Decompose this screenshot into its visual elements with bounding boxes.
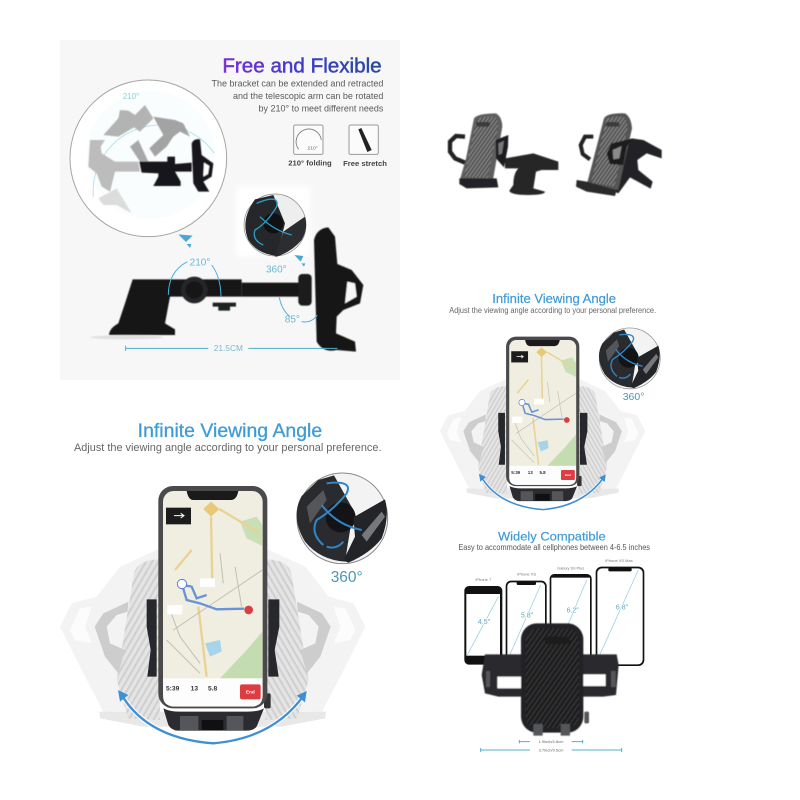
dimension: 3.7 inch [481, 747, 622, 752]
callout pointer triangle right [294, 255, 305, 267]
phone holder illustration [60, 473, 388, 743]
circle: 210 degree folding illustration: 210° [123, 92, 139, 101]
callout pointer triangles left [178, 234, 193, 248]
phone: iPhone 7: 4.5" [478, 619, 491, 626]
trip info on screen small [511, 470, 571, 477]
trip info on screen [166, 686, 255, 695]
phone: iPhone 7: iPhone 7 [475, 577, 492, 582]
angle label 210: 210° [190, 257, 210, 268]
ghost holder right [252, 548, 365, 727]
inset: ball joint [297, 473, 388, 564]
trip info on screen small: End [565, 473, 571, 477]
phone: iPhone XS Max: iPhone XS Max [605, 558, 633, 563]
heading: Widely Compatible: Widely Compatible [498, 530, 606, 544]
panel: infinite viewing angle small [440, 292, 660, 510]
phone: iPhone XS [506, 571, 547, 661]
phone: Galaxy S9 Plus [550, 565, 592, 659]
phone with map small [506, 337, 579, 486]
phone: iPhone 7 [464, 577, 502, 665]
dimension: 1.9 inch [519, 739, 583, 744]
cradle and side grips [147, 599, 279, 731]
trip info on screen small: 5.8 [539, 470, 546, 475]
phone holder front view [482, 623, 619, 736]
phone: iPhone XS: iPhone XS [517, 571, 536, 576]
phone with map [158, 486, 267, 708]
phone: iPhone XS Max: 6.8" [616, 604, 629, 611]
phone holder illustration small [440, 328, 660, 510]
dimension line [126, 343, 337, 353]
trip info on screen small: 5:39 [511, 470, 521, 475]
product: dashboard mount [450, 113, 558, 195]
rotation arc arrow small [479, 474, 606, 510]
description text: and the telescopic arm can be rotated [233, 91, 383, 101]
dimension: 1.9 inch: 1.9inch/4.8cm [539, 739, 564, 744]
ghost holder left small [440, 379, 516, 498]
heading: Free and Flexible: Free and Flexible [222, 55, 382, 77]
trip info on screen: 5.8 [208, 686, 218, 693]
icon: 210 degree folding: 210° [308, 145, 318, 151]
description text: The bracket can be extended and retracted [212, 78, 383, 88]
trip info on screen: 5:39 [166, 686, 180, 693]
blue rotation arcs [168, 262, 317, 322]
angle label 85: 85° [285, 314, 300, 325]
label: free stretch: Free stretch [343, 159, 387, 168]
subheading: size range: Easy to accommodate all cellphones between 4-6.5 inches [458, 543, 650, 552]
product: vent mount [576, 113, 662, 196]
ghost holder left [60, 548, 173, 727]
label: 210 folding: 210° folding [288, 158, 332, 167]
icon: free stretch [349, 125, 378, 154]
panel: infinite viewing angle large [60, 421, 388, 743]
phone: Galaxy S9 Plus: 6.2" [567, 608, 579, 615]
callout: 360 degree joint [237, 187, 310, 257]
dimension line: 21.5CM [214, 343, 243, 353]
panel: two product photos [450, 113, 662, 196]
trip info on screen: 13 [191, 686, 198, 693]
car mount side view [90, 227, 363, 352]
heading: Infinite Viewing Angle: Infinite Viewing Angle [138, 421, 322, 442]
cradle and side grips small [498, 413, 587, 501]
inset: ball joint small [599, 328, 660, 389]
trip info on screen small: 13 [528, 470, 533, 475]
phone: iPhone XS: 5.8" [521, 612, 534, 619]
icon: 210 degree folding [294, 125, 323, 154]
panel: free and flexible [60, 40, 400, 380]
ghost holder right small [569, 379, 645, 498]
heading: Infinite Viewing Angle small: Infinite Viewing Angle [492, 292, 616, 306]
subheading: Adjust the viewing angle according to your personal preference. [74, 442, 382, 454]
rotation arc arrow [118, 690, 307, 743]
subheading small: Adjust the viewing angle according to your personal preference. [449, 306, 656, 315]
phone: iPhone XS Max [596, 558, 644, 666]
description text: by 210° to meet different needs [259, 103, 384, 113]
dimension: 3.7 inch: 3.7inch/9.5cm [539, 747, 564, 752]
trip info on screen: End [246, 690, 255, 695]
circle: 210 degree folding illustration [70, 80, 227, 237]
label: 360 degrees: 360° [331, 569, 363, 586]
angle label 360: 360° [266, 265, 287, 276]
phone: Galaxy S9 Plus: Galaxy S9 Plus [557, 565, 584, 570]
panel: widely compatible [458, 530, 650, 752]
label: 360 degrees small: 360° [623, 391, 644, 403]
